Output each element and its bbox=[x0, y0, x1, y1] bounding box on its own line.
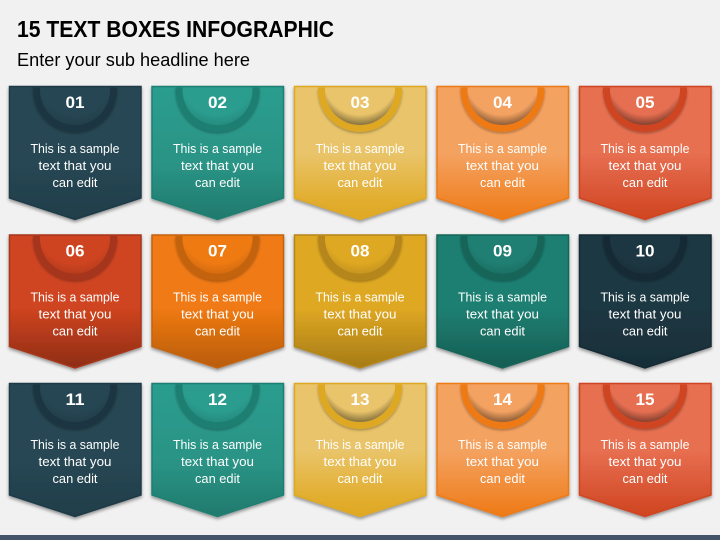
box 13 bbox=[294, 384, 426, 516]
box 07: can edit bbox=[195, 324, 241, 338]
box 12: can edit bbox=[195, 472, 241, 486]
box 15: can edit bbox=[622, 472, 668, 486]
box 06: This is a sample bbox=[30, 290, 120, 304]
box 03: 03 bbox=[350, 94, 370, 112]
box 11: 11 bbox=[66, 391, 84, 409]
box 04: 04 bbox=[493, 94, 513, 112]
box 14: text that you bbox=[466, 455, 539, 469]
box 05: 05 bbox=[636, 94, 654, 112]
box 10: can edit bbox=[622, 324, 668, 338]
box 05: can edit bbox=[622, 176, 668, 190]
box 13: This is a sample bbox=[316, 438, 405, 452]
title: 15 TEXT BOXES INFOGRAPHIC bbox=[17, 16, 334, 42]
box 02: This is a sample bbox=[173, 142, 262, 156]
box 12: text that you bbox=[181, 455, 254, 469]
box 14: 14 bbox=[493, 391, 513, 409]
box 05: This is a sample bbox=[600, 142, 690, 156]
box 11 bbox=[10, 384, 141, 516]
box 09 bbox=[437, 235, 568, 368]
box 03: This is a sample bbox=[316, 142, 405, 156]
box 11: can edit bbox=[52, 472, 98, 486]
box 15: 15 bbox=[636, 391, 654, 409]
box 03: text that you bbox=[324, 159, 397, 173]
box 12: 12 bbox=[208, 391, 227, 409]
box 09: This is a sample bbox=[458, 290, 547, 304]
box 04 bbox=[437, 86, 568, 220]
box 05: text that you bbox=[608, 159, 682, 173]
box 13: 13 bbox=[350, 391, 370, 409]
box 08: This is a sample bbox=[316, 290, 405, 304]
box 02: text that you bbox=[181, 159, 254, 173]
box 12: This is a sample bbox=[173, 438, 262, 452]
box 11: text that you bbox=[38, 455, 112, 469]
box 06: text that you bbox=[38, 308, 112, 322]
box 15: This is a sample bbox=[600, 438, 690, 452]
box 01: 01 bbox=[66, 94, 84, 112]
box 12 bbox=[152, 384, 284, 516]
box 14 bbox=[437, 384, 568, 516]
box 04: can edit bbox=[480, 176, 526, 190]
box 06: 06 bbox=[66, 242, 84, 260]
box 01: text that you bbox=[38, 159, 112, 173]
box 01: can edit bbox=[52, 176, 98, 190]
box 13: text that you bbox=[324, 455, 397, 469]
box 07 bbox=[152, 235, 284, 368]
box 08 bbox=[294, 235, 426, 368]
box 08: text that you bbox=[324, 308, 397, 322]
box 14: This is a sample bbox=[458, 438, 547, 452]
footer bar bbox=[0, 535, 720, 540]
box 07: text that you bbox=[181, 308, 254, 322]
box 15 bbox=[580, 384, 711, 516]
box 06: can edit bbox=[52, 324, 98, 338]
box 08: 08 bbox=[350, 242, 370, 260]
box 01 bbox=[10, 86, 141, 220]
subtitle: Enter your sub headline here bbox=[17, 50, 250, 70]
box 07: 07 bbox=[208, 242, 227, 260]
box 15: text that you bbox=[608, 455, 682, 469]
box 02: 02 bbox=[208, 94, 227, 112]
box 10: 10 bbox=[636, 242, 654, 260]
box 04: text that you bbox=[466, 159, 539, 173]
box 10 bbox=[580, 235, 711, 368]
box 07: This is a sample bbox=[173, 290, 262, 304]
box 08: can edit bbox=[338, 324, 383, 338]
box 13: can edit bbox=[338, 472, 383, 486]
box 09: text that you bbox=[466, 308, 539, 322]
box 03: can edit bbox=[338, 176, 383, 190]
box 04: This is a sample bbox=[458, 142, 547, 156]
box 14: can edit bbox=[480, 472, 526, 486]
box 06 bbox=[10, 235, 141, 368]
box 11: This is a sample bbox=[30, 438, 120, 452]
box 02: can edit bbox=[195, 176, 241, 190]
box 03 bbox=[294, 86, 426, 220]
box 09: 09 bbox=[493, 242, 512, 260]
box 09: can edit bbox=[480, 324, 526, 338]
box 01: This is a sample bbox=[30, 142, 120, 156]
box 10: text that you bbox=[608, 308, 682, 322]
box 05 bbox=[580, 86, 711, 220]
box 02 bbox=[152, 86, 284, 220]
box 10: This is a sample bbox=[600, 290, 690, 304]
